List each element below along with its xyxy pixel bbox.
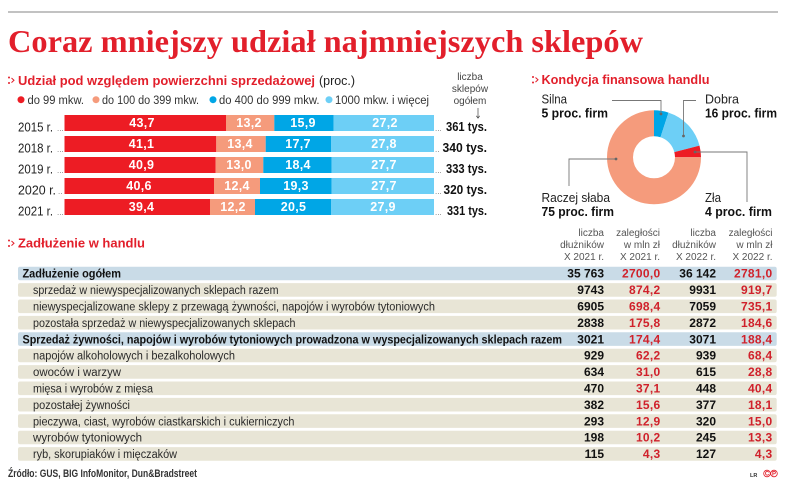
row: specialised total: 3071 xyxy=(689,332,716,346)
column headers: zaległości xyxy=(729,228,772,239)
bar 2021: 2021 r. xyxy=(18,204,53,218)
donut chart xyxy=(607,110,701,204)
row: non-specialised total: 919,7 xyxy=(741,283,773,297)
bar 2018: .. xyxy=(435,145,439,154)
row: bakery: 320 xyxy=(696,414,716,428)
row: other non-specialised xyxy=(18,316,777,330)
column headers: zaległości xyxy=(616,228,660,239)
column headers: w mln zł xyxy=(735,240,773,251)
title: Coraz mniejszy udział najmniejszych sklepów xyxy=(8,23,643,59)
row: non-specialised total: 9743 xyxy=(577,283,604,297)
row: fish: 4,3 xyxy=(755,447,773,461)
logo: author and agency marks: C xyxy=(765,472,770,478)
bar 2018: 27,8 xyxy=(371,137,397,151)
callout: good xyxy=(682,92,777,137)
callout: bad: Zła xyxy=(705,191,721,205)
bar 2019: 40,9 xyxy=(129,158,154,172)
column note: number of stores: ogółem xyxy=(454,96,486,107)
bar 2015: ... xyxy=(435,124,442,133)
row: other food xyxy=(18,398,777,412)
column headers: X 2021 r. xyxy=(564,252,604,263)
bar 2015: 15,9 xyxy=(290,116,316,130)
panel: financial condition xyxy=(532,72,777,219)
bar 2018 xyxy=(18,136,487,156)
row: beverages: napojów alkoholowych i bezalkoholowych xyxy=(33,351,235,363)
legend: 1000 mkw. i więcej xyxy=(335,95,429,107)
bar 2018: ... xyxy=(57,145,64,154)
panel: store area share xyxy=(8,72,489,218)
row: tobacco: 245 xyxy=(696,431,716,445)
row: tobacco xyxy=(18,431,777,445)
heading: store area share: Udział pod względem powierzchni sprzedażowej xyxy=(18,73,315,88)
row: fish: ryb, skorupiaków i mięczaków xyxy=(33,449,178,461)
row: fruit and vegetables: 28,8 xyxy=(748,365,773,379)
row: food-dominant non-specialised: 7059 xyxy=(689,300,716,314)
row: food-dominant non-specialised: niewyspecjalizowane sklepy z przewagą żywności, napojów i wyrobów tytoniowych xyxy=(33,302,435,314)
row: meat: 37,1 xyxy=(636,382,661,396)
callout: strong xyxy=(542,92,662,120)
bar 2020: 27,7 xyxy=(371,179,397,193)
bar 2018: 41,1 xyxy=(129,137,154,151)
row: specialised total xyxy=(18,332,777,346)
bar 2021: 331 tys. xyxy=(447,204,487,218)
row: tobacco: 13,3 xyxy=(748,431,773,445)
bar 2015: 2015 r. xyxy=(18,120,53,134)
callout: rather weak: 75 proc. firm xyxy=(542,205,614,219)
column note: number of stores: sklepów xyxy=(452,84,489,95)
bar 2019: ... xyxy=(435,166,442,175)
row: food-dominant non-specialised: 735,1 xyxy=(741,300,773,314)
row: other food: 18,1 xyxy=(748,398,773,412)
row: beverages: 939 xyxy=(696,349,716,363)
row: total debt: 35 763 xyxy=(567,267,604,281)
row: fruit and vegetables: 615 xyxy=(696,365,716,379)
bar 2018: 2018 r. xyxy=(18,142,53,156)
row: beverages xyxy=(18,349,777,363)
row: food-dominant non-specialised: 6905 xyxy=(577,300,604,314)
bar 2019: 18,4 xyxy=(285,158,311,172)
bar 2020: 40,6 xyxy=(126,179,152,193)
column headers: X 2021 r. xyxy=(620,252,660,263)
bar 2020: 12,4 xyxy=(224,179,250,193)
callout: bad: 4 proc. firm xyxy=(705,205,772,219)
row: specialised total: 188,4 xyxy=(741,332,773,346)
bar 2018: 13,4 xyxy=(227,137,253,151)
bar 2019: 27,7 xyxy=(371,158,397,172)
row: total debt: 2781,0 xyxy=(734,267,773,281)
bar 2015 xyxy=(18,115,487,134)
logo: author and agency marks: LR xyxy=(750,473,757,479)
row: tobacco: 10,2 xyxy=(636,431,661,445)
row: beverages: 929 xyxy=(584,349,604,363)
row: tobacco: wyrobów tytoniowych xyxy=(32,433,142,445)
bar 2015: 43,7 xyxy=(129,116,155,130)
row: other non-specialised: 2872 xyxy=(689,316,716,330)
row: other non-specialised: 175,8 xyxy=(629,316,661,330)
column headers: w mln zł xyxy=(623,240,661,251)
column headers: dłużników xyxy=(560,240,605,251)
callout: rather weak xyxy=(542,158,617,219)
column headers: dłużników xyxy=(672,240,717,251)
legend: do 99 mkw. xyxy=(28,95,84,107)
bar 2021: 27,9 xyxy=(370,200,396,214)
bar 2015: 361 tys. xyxy=(446,120,487,134)
column headers: X 2022 r. xyxy=(676,252,716,263)
bar 2020: .. xyxy=(58,187,62,196)
bar 2019: 333 tys. xyxy=(446,162,487,176)
row: fruit and vegetables: 634 xyxy=(584,365,604,379)
row: total debt xyxy=(18,267,777,281)
row: food-dominant non-specialised xyxy=(18,300,777,314)
row: non-specialised total: 874,2 xyxy=(629,283,661,297)
row: non-specialised total: 9931 xyxy=(689,283,716,297)
row: bakery: 15,0 xyxy=(748,414,773,428)
row: meat: 40,4 xyxy=(748,382,773,396)
row: other non-specialised: pozostała sprzedaż w niewyspecjalizowanych sklepach xyxy=(33,318,296,330)
stacked bar chart xyxy=(18,115,487,218)
source note: Źródło: GUS, BIG InfoMonitor, Dun&Bradstreet xyxy=(8,467,197,480)
row: total debt: 36 142 xyxy=(679,267,716,281)
panel: debt table xyxy=(8,228,777,461)
row: other non-specialised: 2838 xyxy=(577,316,604,330)
row: non-specialised total xyxy=(18,283,777,297)
row: fruit and vegetables: 31,0 xyxy=(636,365,661,379)
bar 2021: 12,2 xyxy=(220,200,246,214)
row: meat: 470 xyxy=(584,382,604,396)
row: other food: pozostałej żywności xyxy=(33,400,130,412)
bar 2021 xyxy=(18,199,487,218)
bar 2019: ... xyxy=(57,166,64,175)
row: other food: 377 xyxy=(696,398,716,412)
row: bakery: 12,9 xyxy=(636,414,661,428)
row: total debt: Zadłużenie ogółem xyxy=(22,269,121,281)
row: total debt: 2700,0 xyxy=(622,267,661,281)
row: bakery: 293 xyxy=(584,414,604,428)
callout: bad xyxy=(694,151,772,219)
row: fish: 4,3 xyxy=(643,447,661,461)
row: fruit and vegetables: owoców i warzyw xyxy=(33,367,122,379)
bar 2021: 20,5 xyxy=(281,200,306,214)
bar 2020: ... xyxy=(435,187,442,196)
row: specialised total: Sprzedaż żywności, napojów i wyrobów tytoniowych prowadzona w wyspecjalizowanych sklepach razem xyxy=(22,334,562,346)
row: other non-specialised: 184,6 xyxy=(741,316,773,330)
bar 2019: 2019 r. xyxy=(18,162,53,176)
heading: financial condition: Kondycja finansowa handlu xyxy=(542,72,710,87)
row: non-specialised total: sprzedaż w niewyspecjalizowanych sklepach razem xyxy=(33,285,278,297)
bar 2018: 340 tys. xyxy=(442,141,487,155)
column headers xyxy=(560,228,773,263)
row: specialised total: 3021 xyxy=(577,332,604,346)
column headers: liczba xyxy=(578,228,604,239)
bar 2021: ... xyxy=(57,208,64,217)
row: food-dominant non-specialised: 698,4 xyxy=(629,300,661,314)
row: beverages: 68,4 xyxy=(748,349,773,363)
callout: good: 16 proc. firm xyxy=(705,106,777,120)
column note: number of stores xyxy=(452,72,489,118)
bar 2015: ... xyxy=(57,124,64,133)
bar 2020 xyxy=(18,178,487,198)
logo: author and agency marks xyxy=(750,470,777,479)
column headers: liczba xyxy=(690,228,716,239)
bar 2015: 27,2 xyxy=(372,116,398,130)
legend xyxy=(18,95,429,107)
row: other food: 15,6 xyxy=(636,398,661,412)
row: fish: 115 xyxy=(585,447,604,461)
callout: strong: Silna xyxy=(542,92,567,106)
row: fish: 127 xyxy=(696,447,716,461)
row: meat: mięsa i wyrobów z mięsa xyxy=(33,384,154,396)
row: fruit and vegetables xyxy=(18,365,777,379)
bar 2020: 320 tys. xyxy=(444,183,487,197)
bar 2015: 13,2 xyxy=(236,116,262,130)
bar 2021: 39,4 xyxy=(129,200,154,214)
bar 2019: 13,0 xyxy=(226,158,252,172)
bar 2018: 17,7 xyxy=(285,137,311,151)
row: bakery xyxy=(18,414,777,428)
row: other food: 382 xyxy=(584,398,604,412)
callout: rather weak: Raczej słaba xyxy=(542,191,610,205)
row: beverages: 62,2 xyxy=(636,349,661,363)
bar 2019 xyxy=(18,157,487,176)
row: meat xyxy=(18,382,777,396)
heading: debt: Zadłużenie w handlu xyxy=(18,236,145,251)
legend: do 100 do 399 mkw. xyxy=(102,95,199,107)
row: specialised total: 174,4 xyxy=(629,332,661,346)
row: fish xyxy=(18,447,777,461)
row: bakery: pieczywa, ciast, wyrobów ciastkarskich i cukierniczych xyxy=(33,416,294,428)
callout: good: Dobra xyxy=(705,92,739,106)
bar 2020: 2020 r. xyxy=(18,184,56,198)
bar 2020: 19,3 xyxy=(283,179,309,193)
logo: author and agency marks: P xyxy=(772,472,776,478)
column headers: X 2022 r. xyxy=(732,252,772,263)
row: tobacco: 198 xyxy=(584,431,604,445)
heading: store area share: (proc.) xyxy=(319,74,355,88)
column note: number of stores: liczba xyxy=(457,72,483,83)
legend: do 400 do 999 mkw. xyxy=(219,95,320,107)
row: meat: 448 xyxy=(696,382,716,396)
bar 2021: ... xyxy=(435,208,442,217)
callout: strong: 5 proc. firm xyxy=(542,106,608,120)
